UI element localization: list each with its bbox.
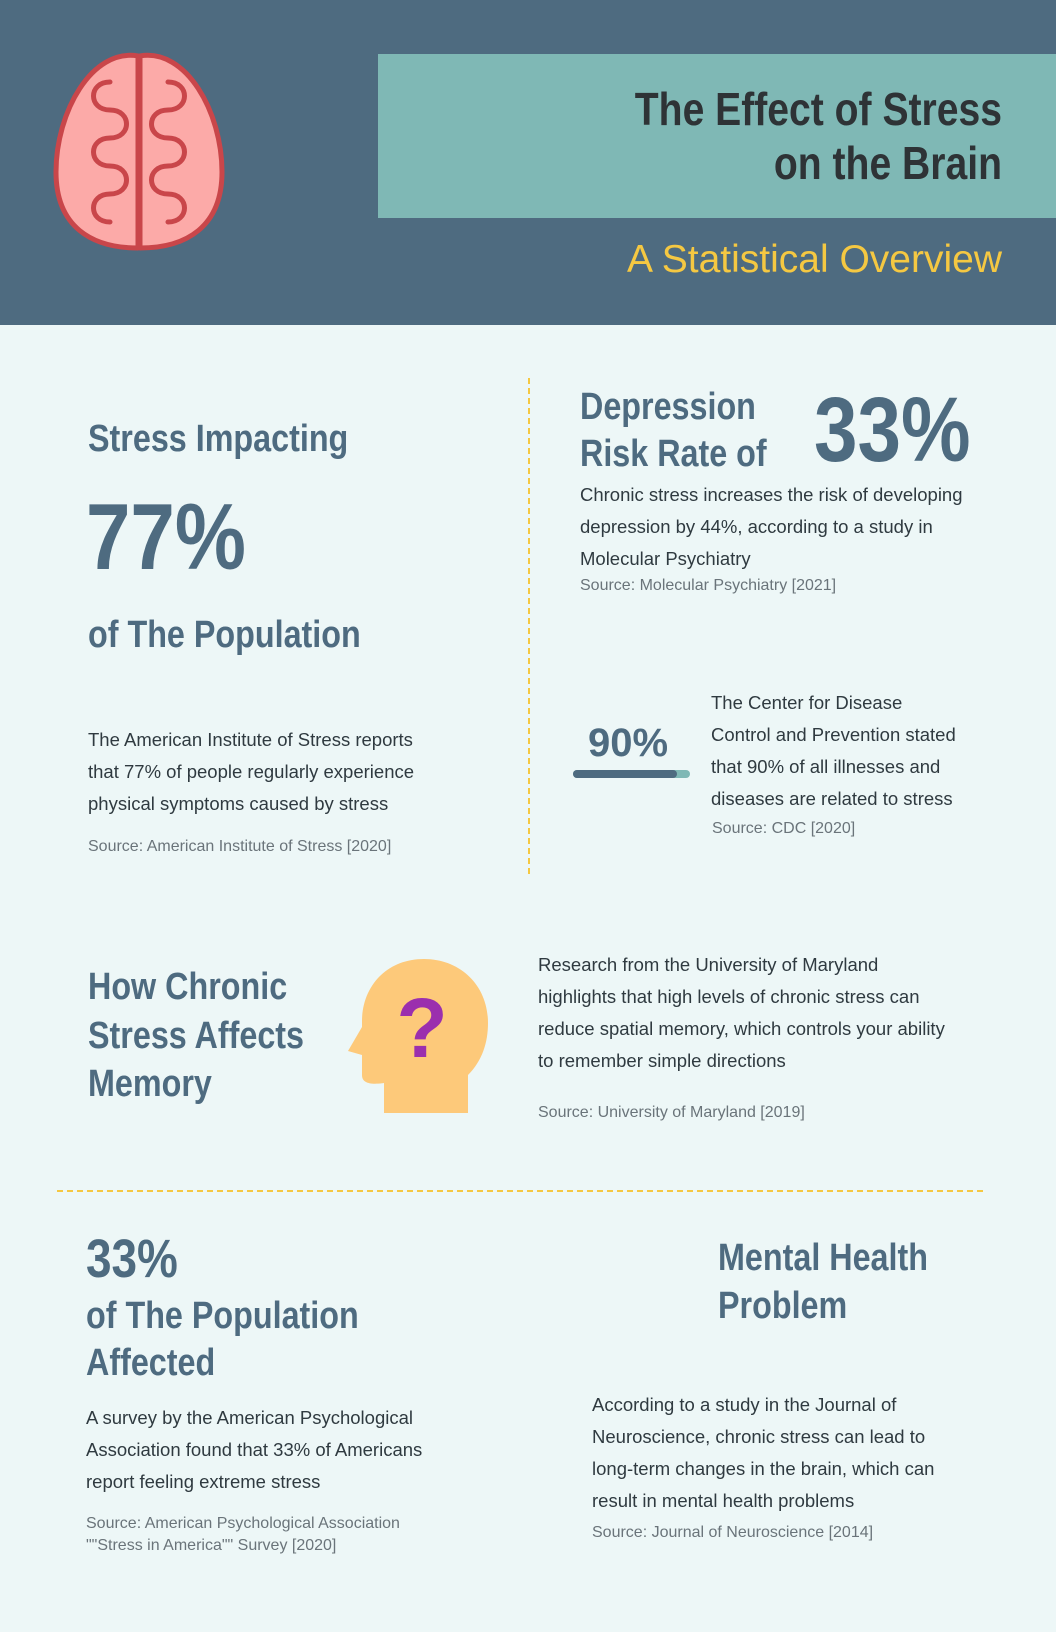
title	[635, 83, 1002, 189]
header band	[0, 0, 1056, 325]
heading: Stress Affects	[88, 1014, 304, 1056]
heading: Affected	[86, 1342, 215, 1384]
text: that 90% of all illnesses and	[711, 756, 940, 777]
text: reduce spatial memory, which controls your ability	[538, 1018, 945, 1039]
text	[580, 484, 963, 569]
text: Molecular Psychiatry	[580, 548, 751, 569]
text: report feeling extreme stress	[86, 1471, 320, 1492]
text: A survey by the American Psychological	[86, 1407, 413, 1428]
source: Source: University of Maryland [2019]	[538, 1104, 805, 1121]
text: Chronic stress increases the risk of developing	[580, 484, 963, 505]
heading	[88, 966, 304, 1105]
subheading: of The Population	[88, 614, 361, 656]
heading: How Chronic	[88, 966, 287, 1008]
big number: 33%	[86, 1229, 178, 1289]
title: The Effect of Stress	[635, 83, 1002, 135]
panel: memory	[88, 954, 945, 1121]
text: highlights that high levels of chronic stress can	[538, 986, 920, 1007]
source	[86, 1515, 400, 1554]
big number: 33%	[814, 379, 971, 481]
source: Source: American Institute of Stress [2020]	[88, 838, 391, 855]
text: to remember simple directions	[538, 1050, 786, 1071]
stat 90%: 90%	[588, 721, 668, 765]
heading: Memory	[88, 1063, 212, 1105]
heading	[580, 386, 767, 475]
text: result in mental health problems	[592, 1490, 854, 1511]
heading: Depression	[580, 386, 756, 428]
text: that 77% of people regularly experience	[88, 761, 414, 782]
heading: Risk Rate of	[580, 433, 767, 475]
panel: 90% CDC	[573, 692, 956, 837]
panel: stress impacting 77%	[86, 418, 414, 855]
icon: head with question mark	[348, 959, 488, 1113]
source: Source: CDC [2020]	[712, 820, 855, 837]
heading	[718, 1237, 928, 1327]
text: physical symptoms caused by stress	[88, 793, 388, 814]
heading: Mental Health	[718, 1237, 928, 1279]
progress bar	[573, 770, 690, 778]
text	[711, 692, 956, 809]
text	[592, 1394, 934, 1511]
source: Source: Journal of Neuroscience [2014]	[592, 1524, 873, 1541]
icon: brain	[54, 52, 224, 250]
text: The American Institute of Stress reports	[88, 729, 413, 750]
divider horizontal	[57, 1190, 983, 1192]
title: on the Brain	[774, 137, 1002, 189]
text	[86, 1407, 422, 1492]
heading: of The Population	[86, 1295, 359, 1337]
source: ""Stress in America"" Survey [2020]	[86, 1537, 336, 1554]
text: long-term changes in the brain, which can	[592, 1458, 934, 1479]
text: The Center for Disease	[711, 692, 902, 713]
title box	[378, 54, 1056, 218]
heading	[86, 1295, 359, 1384]
divider vertical	[528, 378, 530, 874]
text: According to a study in the Journal of	[592, 1394, 896, 1415]
text: Neuroscience, chronic stress can lead to	[592, 1426, 925, 1447]
source: Source: American Psychological Association	[86, 1515, 400, 1532]
panel: 33% population affected	[86, 1229, 422, 1554]
icon: head with question mark: ?	[396, 981, 448, 1075]
subtitle: A Statistical Overview	[627, 238, 1002, 281]
text: diseases are related to stress	[711, 788, 953, 809]
big number: 77%	[86, 484, 246, 589]
heading: Stress Impacting	[88, 418, 348, 460]
text: Association found that 33% of Americans	[86, 1439, 422, 1460]
panel: mental health problem	[592, 1237, 934, 1541]
text: Research from the University of Maryland	[538, 954, 878, 975]
panel: depression risk	[580, 379, 971, 594]
text: Control and Prevention stated	[711, 724, 956, 745]
source: Source: Molecular Psychiatry [2021]	[580, 577, 836, 594]
text	[88, 729, 414, 814]
text	[538, 954, 945, 1071]
heading: Problem	[718, 1285, 847, 1327]
text: depression by 44%, according to a study in	[580, 516, 933, 537]
